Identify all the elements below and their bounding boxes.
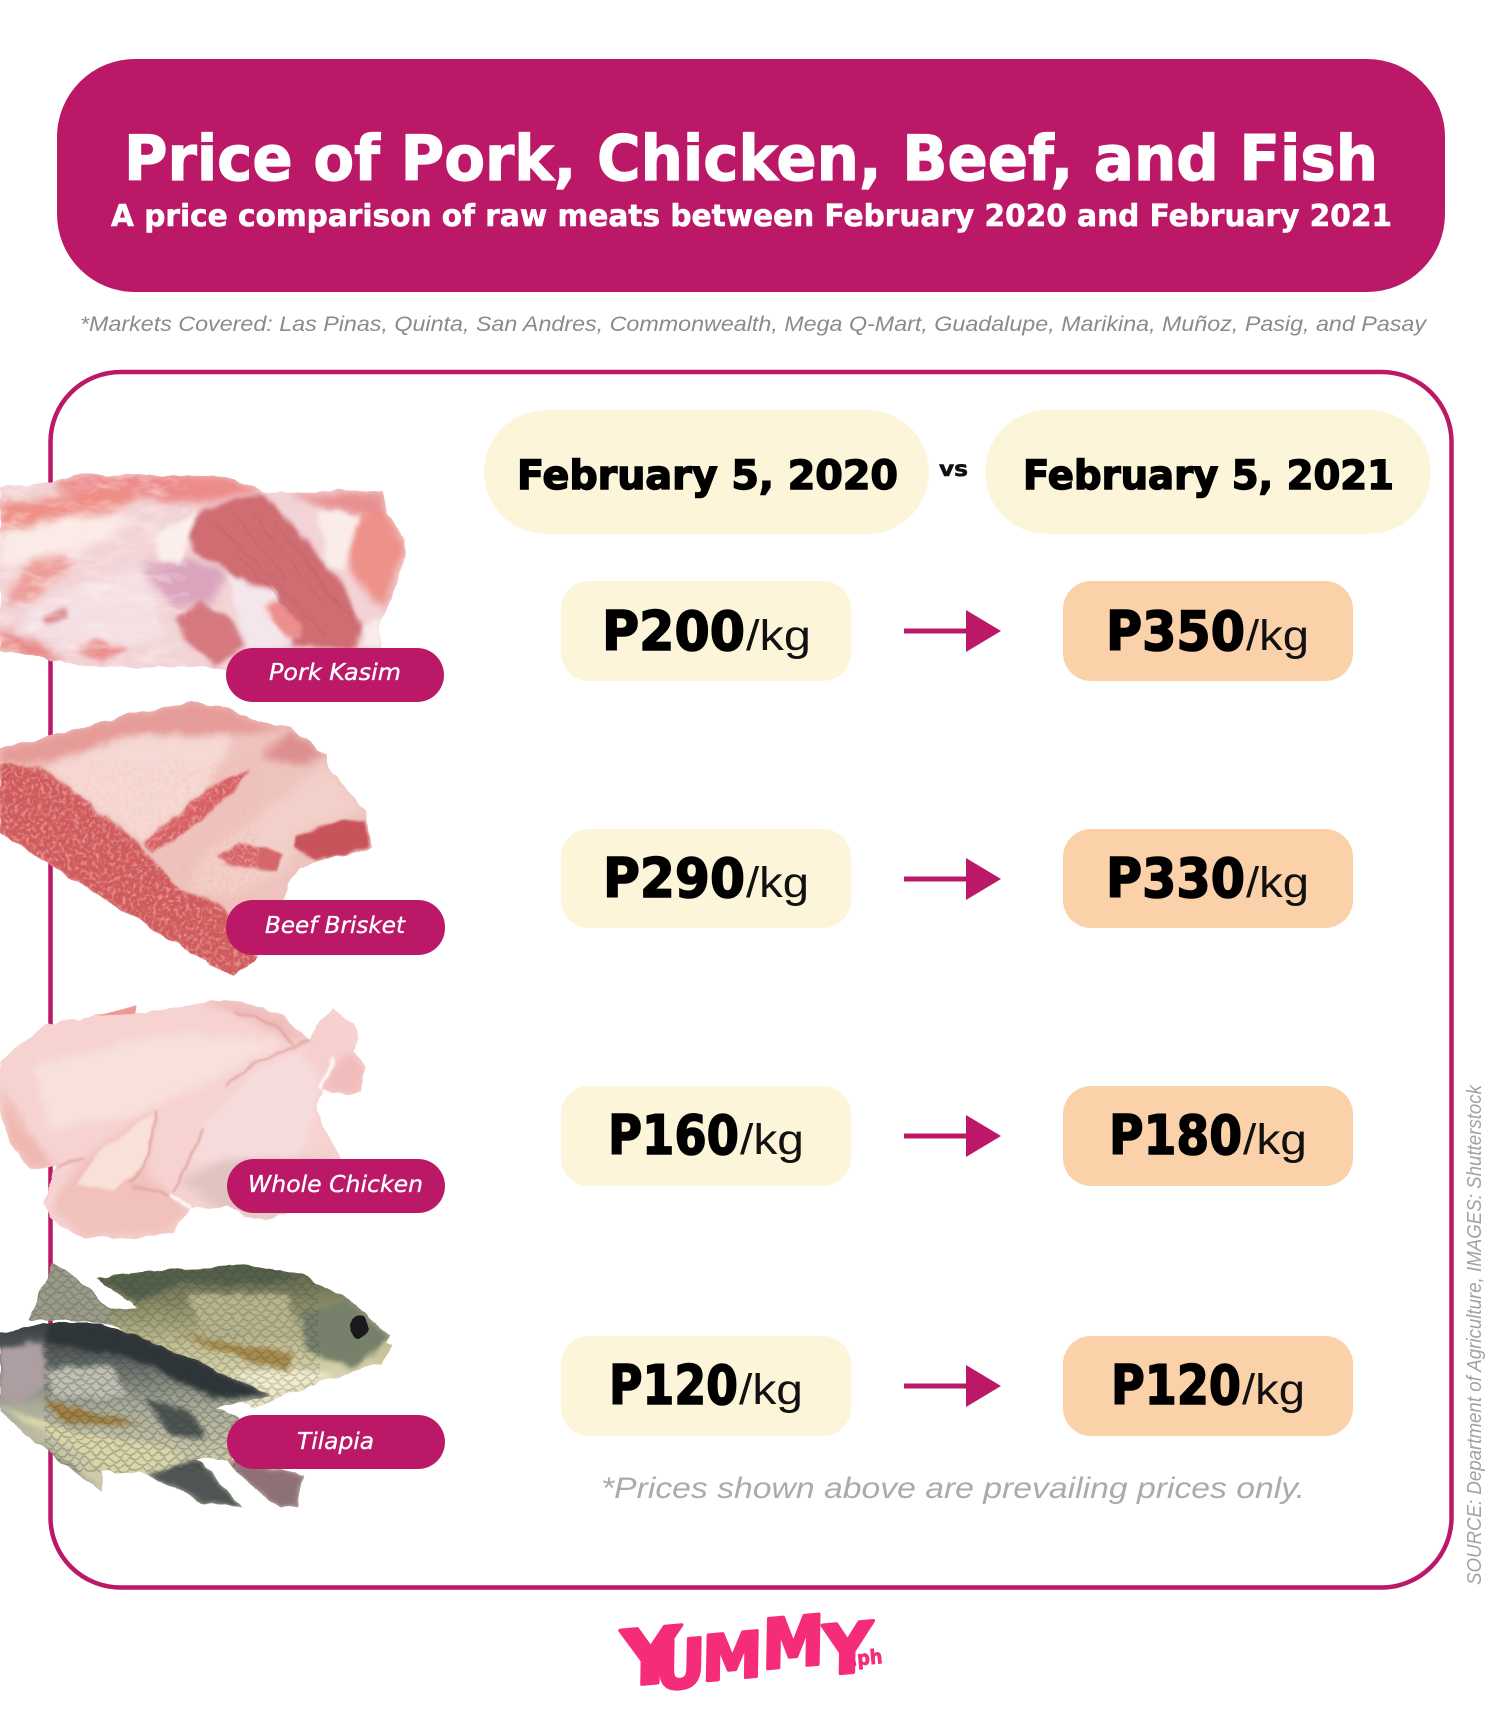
- date header: February 5, 2020: February 5, 2020: [517, 453, 898, 499]
- label: Tilapia: [227, 1415, 445, 1469]
- logo: Yummy.ph: .ph: [849, 1644, 883, 1671]
- price 2020: P160: [561, 1086, 851, 1186]
- row: beef prices: [561, 829, 1353, 928]
- image: beef brisket: [0, 700, 377, 979]
- price 2020: P160: /kg: [740, 1116, 804, 1164]
- logo: Yummy.ph: M: [762, 1601, 825, 1686]
- label: Tilapia: Tilapia: [297, 1429, 374, 1455]
- logo: Yummy.ph: Y: [821, 1608, 875, 1692]
- price 2021: P180: /kg: [1243, 1116, 1307, 1164]
- date header: February 5, 2021: [985, 410, 1431, 534]
- price 2020: P200: P200: [602, 600, 745, 663]
- title banner: [57, 59, 1445, 292]
- subtitle: A price comparison of raw meats between February 2020 and February 2021: [111, 199, 1392, 234]
- label: Whole Chicken: Whole Chicken: [248, 1172, 423, 1198]
- price 2020: P120: P120: [609, 1354, 738, 1417]
- label: Beef Brisket: [226, 900, 445, 955]
- date header: February 5, 2021: February 5, 2021: [1023, 453, 1394, 499]
- logo: Yummy.ph: M: [702, 1618, 763, 1696]
- price 2021: P180: P180: [1109, 1104, 1242, 1167]
- lower fish: [0, 1319, 307, 1512]
- arrow: [904, 1365, 1001, 1407]
- image: pork kasim: [0, 468, 410, 679]
- image: tilapia fish: [0, 1262, 397, 1512]
- price 2021: P180: [1063, 1086, 1353, 1186]
- price 2020: P120: /kg: [739, 1366, 803, 1414]
- price 2021: P330: P330: [1106, 847, 1245, 910]
- panel: price comparison frame: [50, 372, 1452, 1588]
- title: Price of Pork, Chicken, Beef, and Fish: [124, 122, 1378, 195]
- price 2020: P290: P290: [603, 847, 745, 910]
- label: Beef Brisket: Beef Brisket: [265, 913, 406, 939]
- row: pork prices: [561, 581, 1353, 681]
- price 2021: P120: [1063, 1336, 1353, 1436]
- image: whole chicken: [0, 994, 373, 1244]
- vs label: vs: [939, 457, 968, 481]
- arrow: [904, 610, 1001, 652]
- source credit: SOURCE: Department of Agriculture, IMAGES: Shutterstock: [1464, 1084, 1486, 1585]
- price 2020: P200: [561, 581, 851, 681]
- footnote: *Prices shown above are prevailing prices only.: [601, 1472, 1305, 1505]
- logo: Yummy.ph: [619, 1601, 883, 1706]
- price 2020: P290: [561, 829, 851, 928]
- label: Pork Kasim: [226, 648, 444, 702]
- price 2021: P120: P120: [1111, 1354, 1241, 1417]
- arrow: [904, 1115, 1001, 1157]
- price 2021: P330: [1063, 829, 1353, 928]
- row: tilapia prices: [561, 1336, 1353, 1436]
- price 2021: P350: P350: [1106, 600, 1245, 663]
- label: Pork Kasim: Pork Kasim: [269, 660, 401, 686]
- price 2021: P350: /kg: [1246, 612, 1309, 660]
- price 2020: P160: P160: [608, 1104, 739, 1167]
- date header: February 5, 2020: [484, 410, 929, 534]
- price 2020: P120: [561, 1336, 851, 1436]
- price 2021: P120: /kg: [1242, 1366, 1305, 1414]
- label: Whole Chicken: [227, 1159, 445, 1213]
- arrow: [904, 858, 1001, 900]
- price 2021: P350: [1063, 581, 1353, 681]
- logo: Yummy.ph: U: [655, 1624, 706, 1706]
- price 2020: P290: /kg: [746, 859, 809, 907]
- row: chicken prices: [561, 1086, 1353, 1186]
- markets covered note: *Markets Covered: Las Pinas, Quinta, San Andres, Commonwealth, Mega Q-Mart, Guadalupe, Marikina, Muñoz, Pasig, and Pasay: [80, 313, 1428, 336]
- price 2021: P330: /kg: [1246, 859, 1309, 907]
- upper fish: [20, 1262, 397, 1412]
- price 2020: P200: /kg: [746, 612, 811, 660]
- logo: Yummy.ph: Y: [619, 1610, 682, 1704]
